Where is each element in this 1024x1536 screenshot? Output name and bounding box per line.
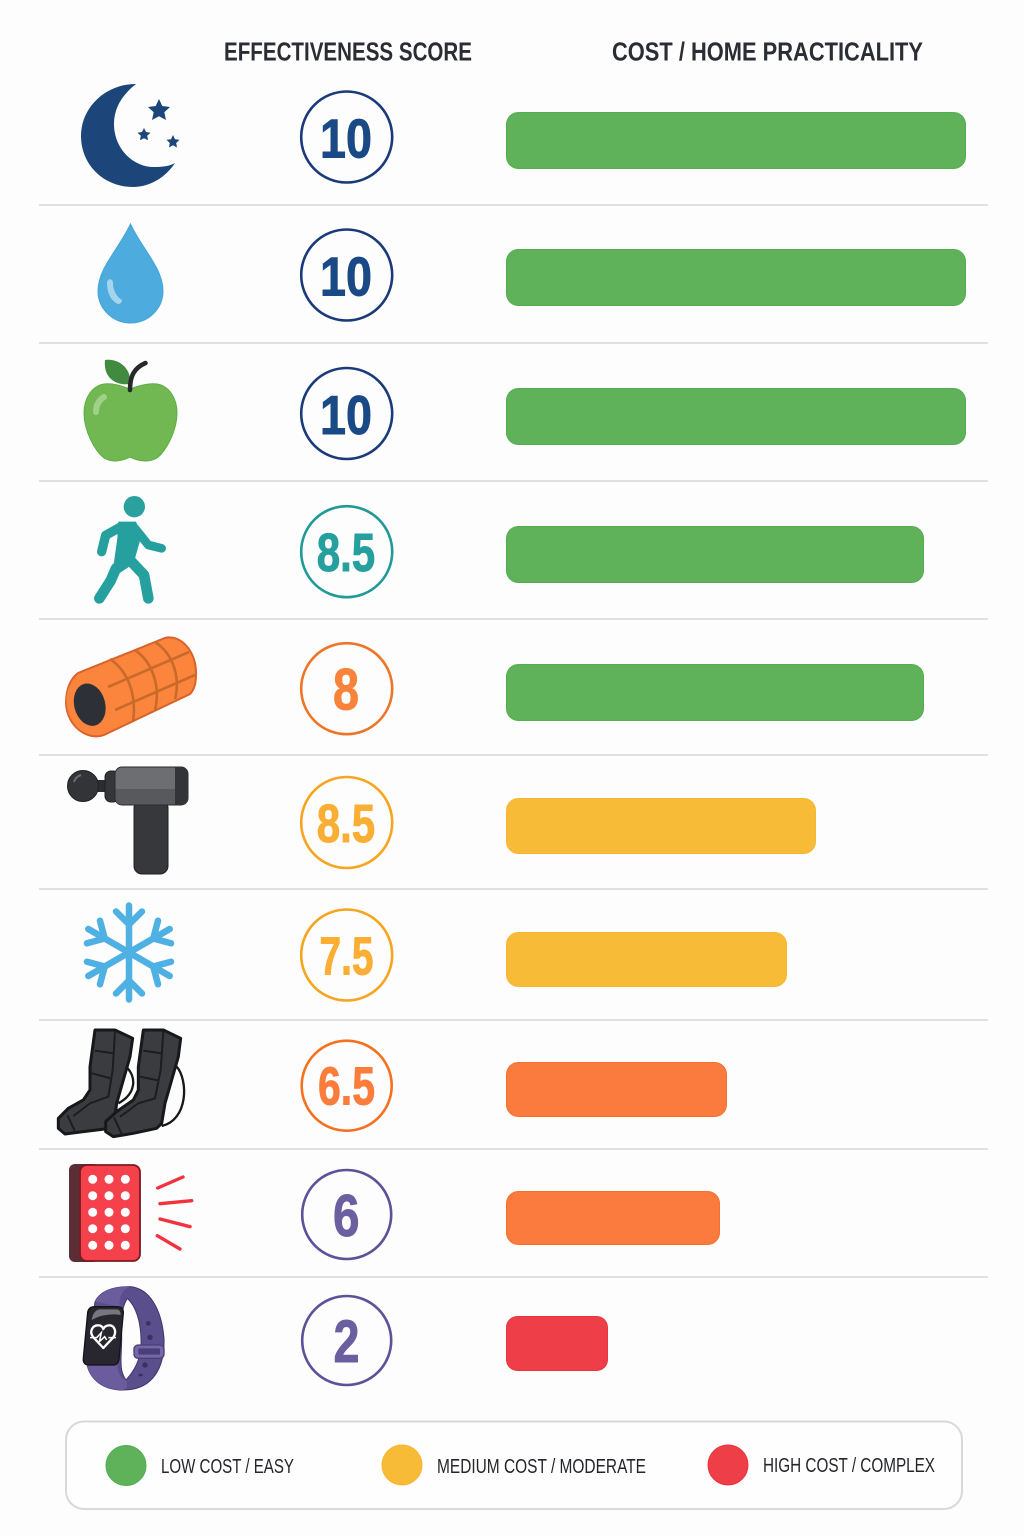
score: 6: [302, 1170, 391, 1259]
legend: [66, 1422, 962, 1509]
score: 6: 6: [333, 1183, 360, 1249]
icon: massage gun: [68, 767, 188, 874]
icon: green apple: [84, 360, 177, 461]
bar: medium cost: [506, 932, 786, 986]
legend item: low cost / easy: LOW COST / EASY: [161, 1456, 294, 1478]
score: 8: [301, 643, 392, 734]
legend item: medium cost / moderate: [382, 1445, 646, 1485]
bar: low cost: [506, 388, 966, 444]
score: 8.5: 8.5: [317, 523, 375, 583]
bar: high-medium cost: [506, 1192, 720, 1244]
icon: water drop: [98, 224, 163, 323]
score: 10: 10: [320, 108, 372, 170]
score: 2: 2: [334, 1308, 360, 1375]
bar: low cost: [506, 526, 924, 582]
icon: snowflake: [82, 906, 176, 1000]
heading: cost / home practicality: COST / HOME PRACTICALITY: [612, 36, 923, 66]
bar: high-medium cost: [506, 1062, 726, 1116]
icon: red light therapy panel: [69, 1164, 192, 1262]
score: 8: 8: [333, 658, 359, 722]
score: 10: 10: [320, 384, 372, 446]
score: 8.5: [301, 506, 392, 597]
bar: low cost: [506, 664, 924, 720]
icon: moon and stars: [81, 84, 180, 187]
score: 10: [301, 92, 392, 182]
legend item: high cost / complex: [708, 1445, 935, 1485]
score: 6.5: [302, 1041, 392, 1131]
icon: fitness tracker watch: [83, 1287, 164, 1390]
score: 10: [301, 368, 392, 459]
score: 6.5: 6.5: [318, 1056, 375, 1116]
score: 7.5: [301, 910, 392, 1000]
legend item: high cost / complex: HIGH COST / COMPLEX: [763, 1455, 935, 1477]
bar: medium cost: [506, 798, 816, 854]
score: 10: [301, 230, 392, 320]
icon: foam roller: [60, 637, 196, 739]
bar: low cost: [506, 112, 966, 168]
bar: low cost: [506, 250, 966, 306]
legend item: medium cost / moderate: MEDIUM COST / MODERATE: [437, 1456, 646, 1478]
legend item: low cost / easy: [106, 1446, 294, 1486]
icon: walking person: [99, 496, 162, 598]
heading: effectiveness score: EFFECTIVENESS SCORE: [224, 36, 472, 66]
icon: compression boots: [58, 1030, 184, 1137]
score: 8.5: [301, 777, 392, 868]
bar: high cost: [506, 1316, 608, 1370]
score: 2: [302, 1296, 391, 1385]
score: 7.5: 7.5: [320, 926, 374, 986]
score: 8.5: 8.5: [317, 794, 375, 854]
score: 10: 10: [320, 246, 372, 308]
